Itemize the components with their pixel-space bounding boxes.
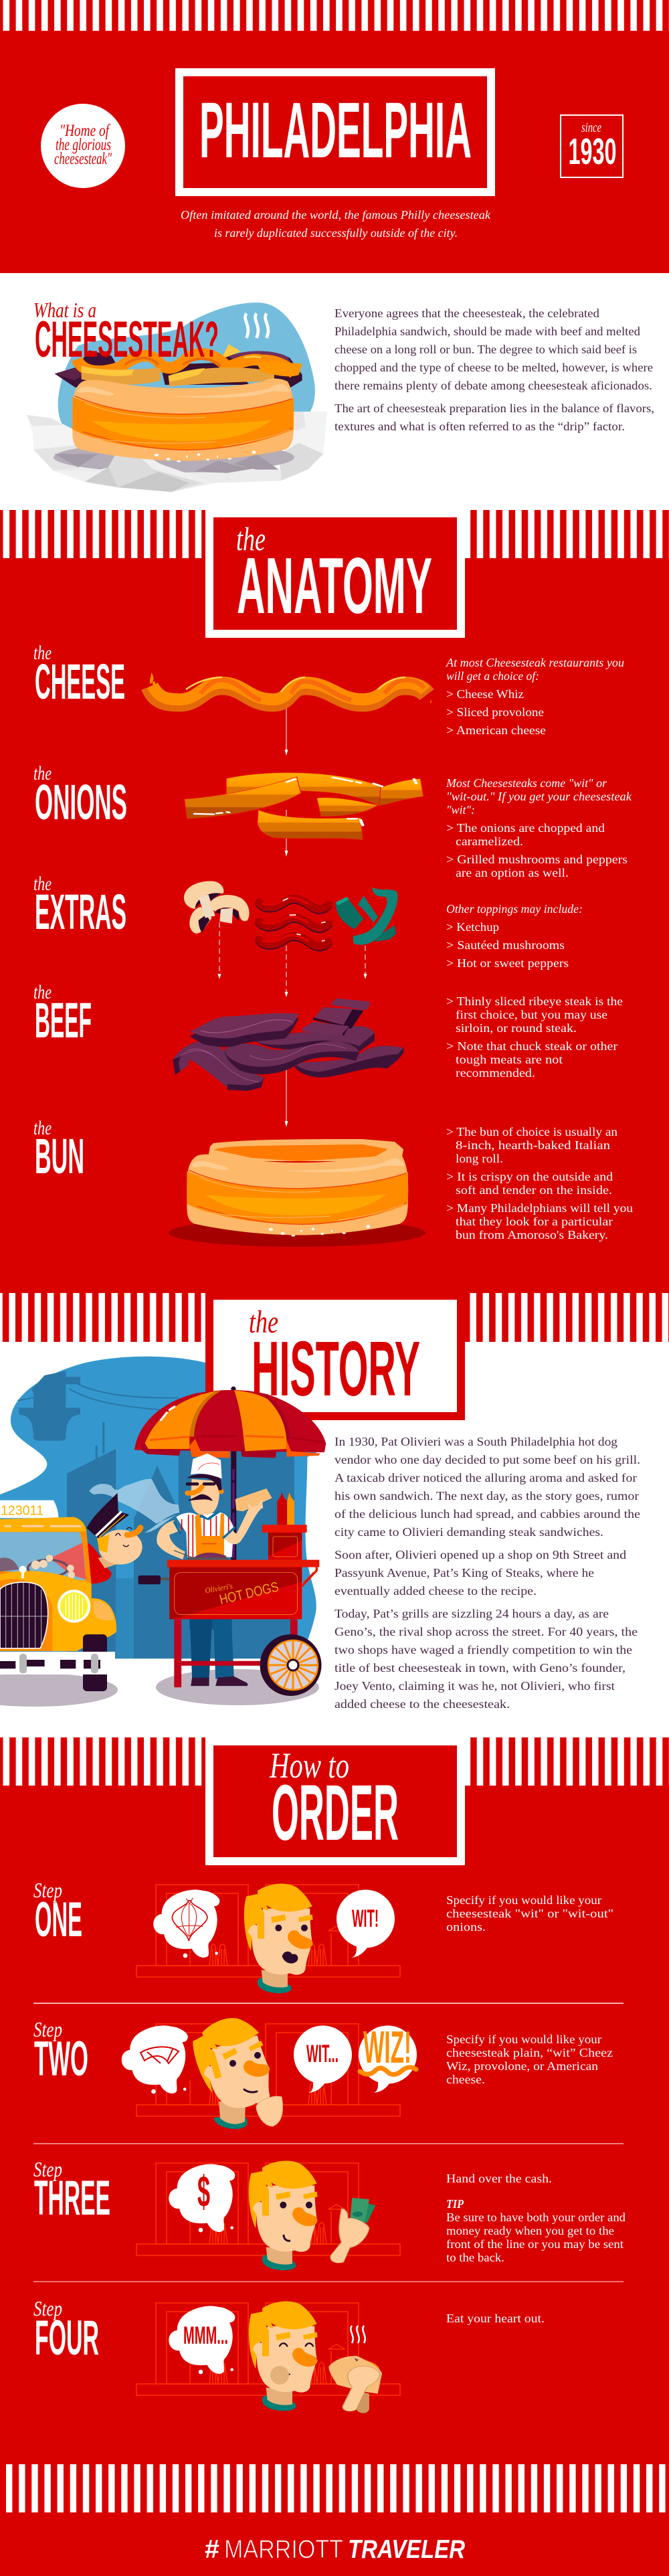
section title: the history: the xyxy=(249,1304,278,1340)
section title: the anatomy: the xyxy=(236,520,266,557)
arrows: extras to beef xyxy=(218,922,367,997)
history text: vendor who one day decided to put some beef on his grill. xyxy=(334,1453,640,1466)
step two label: Step xyxy=(33,2017,62,2041)
step two text xyxy=(446,2033,613,2086)
cart: HOT DOGS xyxy=(218,1579,280,1608)
intro subtitle: Often imitated around the world, the famous Philly cheesesteak xyxy=(181,208,491,222)
illustration: sliced beef xyxy=(173,999,403,1091)
panel: history xyxy=(0,1293,669,1737)
onions text: caramelized. xyxy=(456,835,523,848)
text: BEEF xyxy=(35,993,92,1048)
section title: how to order: How to xyxy=(269,1745,349,1786)
arrow: cheese to onions xyxy=(285,706,288,756)
cheese text xyxy=(446,656,624,737)
man thinking xyxy=(187,2010,283,2129)
step two text: cheese. xyxy=(446,2073,485,2086)
history text: Geno’s, the rival shop across the street. For 40 years, the xyxy=(334,1625,638,1638)
step one label: Step xyxy=(33,1878,62,1902)
footer hashtag: TRAVELER xyxy=(348,2535,465,2564)
bun text: soft and tender on the inside. xyxy=(456,1183,612,1197)
badge: home of the glorious cheesesteak: cheesesteak" xyxy=(54,150,112,168)
onions text: > Grilled mushrooms and peppers xyxy=(446,853,628,866)
beef text: recommended. xyxy=(456,1066,535,1080)
beef text: first choice, but you may use xyxy=(456,1008,607,1021)
step three text: front of the line or you may be sent xyxy=(446,2237,624,2251)
label: the onions: the xyxy=(33,762,52,784)
badge: since 1930: since xyxy=(581,120,601,135)
onions text xyxy=(446,776,632,879)
cheese text: > Cheese Whiz xyxy=(446,687,524,701)
step two text: Specify if you would like your xyxy=(446,2033,601,2046)
step two text: Wiz, provolone, or American xyxy=(446,2059,598,2073)
history text: Soon after, Olivieri opened up a shop on 9th Street and xyxy=(334,1548,626,1561)
step three text: Be sure to have both your order and xyxy=(446,2211,626,2224)
text: BUN xyxy=(35,1128,84,1184)
text: ONIONS xyxy=(35,774,127,830)
thought bubble: mmm xyxy=(169,2306,235,2374)
history text: Joey Vento, claiming it was he, not Olivieri, who first xyxy=(334,1679,615,1693)
thought bubble: money xyxy=(169,2164,235,2232)
footer hashtag: # xyxy=(205,2535,219,2564)
cart xyxy=(138,1560,319,1619)
illustration: caramelized onions xyxy=(185,772,423,840)
man eating xyxy=(249,2302,318,2411)
bun text: bun from Amoroso's Bakery. xyxy=(456,1228,608,1241)
history text: In 1930, Pat Olivieri was a South Philadelphia hot dog xyxy=(334,1435,617,1448)
driver xyxy=(86,1493,142,1584)
onions text: "wit-out." If you get your cheesesteak xyxy=(446,790,632,803)
history text: added cheese to the cheesesteak. xyxy=(334,1697,510,1711)
man with cash xyxy=(249,2161,318,2270)
extras text: > Ketchup xyxy=(446,920,499,934)
taxi xyxy=(0,1500,116,1691)
onions text: Most Cheesesteaks come "wit" or xyxy=(446,776,607,790)
extras text: > Sautéed mushrooms xyxy=(446,938,565,952)
beef text: > Thinly sliced ribeye steak is the xyxy=(446,995,623,1008)
condiment stand xyxy=(262,1492,307,1560)
label: the bun xyxy=(33,1117,84,1184)
history text: of the delicious lunch had spread, and cabbies around the xyxy=(334,1507,640,1521)
step three label xyxy=(33,2157,110,2225)
icon: ketchup xyxy=(259,897,328,948)
section title: the anatomy: ANATOMY xyxy=(237,541,432,630)
beef text xyxy=(446,995,623,1080)
section title: the history xyxy=(209,1296,461,1416)
ground shadows xyxy=(0,1669,319,1707)
history text xyxy=(334,1435,640,1711)
history text: two shops have waged a friendly competition to win the xyxy=(334,1643,632,1656)
text: EXTRAS xyxy=(35,884,126,940)
intro body text: Philadelphia sandwich, should be made with beef and melted xyxy=(334,325,640,338)
label: the cheese xyxy=(33,642,125,709)
icon: mushrooms xyxy=(184,881,250,934)
step four label xyxy=(33,2296,99,2365)
beef text: sirloin, or round steak. xyxy=(456,1021,577,1035)
footer hashtag xyxy=(205,2535,465,2564)
umbrella xyxy=(134,1390,326,1458)
thought bubble: money: $ xyxy=(197,2166,210,2216)
thought bubble: cheese xyxy=(122,2026,188,2093)
history text: Today, Pat’s grills are sizzling 24 hours a day, as are xyxy=(334,1607,609,1620)
bun text: > It is crispy on the outside and xyxy=(446,1170,613,1183)
footer hashtag: MARRIOTT xyxy=(224,2535,343,2564)
label: the cheese: the xyxy=(33,642,52,664)
bun text: 8-inch, hearth-baked Italian xyxy=(456,1138,610,1152)
illustration background: city skyline xyxy=(0,1357,324,1658)
heading: what is a cheesesteak: What is a xyxy=(33,298,96,322)
step four label: Step xyxy=(33,2296,62,2320)
intro body text: there remains plenty of debate among cheesesteak aficionados. xyxy=(334,379,652,392)
icon: green peppers xyxy=(336,889,397,944)
bun text xyxy=(446,1125,633,1241)
step three text: to the back. xyxy=(446,2251,504,2264)
history text: A taxicab driver noticed the alluring aroma and asked for xyxy=(334,1471,637,1484)
illustration: cheesesteak on paper xyxy=(27,303,327,492)
step two text: cheesesteak plain, “wit” Cheez xyxy=(446,2046,613,2059)
illustration: mushrooms, ketchup, peppers xyxy=(184,881,397,948)
badge: home of the glorious cheesesteak: "Home of xyxy=(60,122,110,140)
step one text: cheesesteak "wit" or "wit-out" xyxy=(446,1907,613,1920)
intro body text: chopped and the type of cheese to be melted, however, is where xyxy=(334,361,653,374)
step three text: Hand over the cash. xyxy=(446,2172,552,2185)
header stripes xyxy=(0,0,669,31)
intro subtitle: is rarely duplicated successfully outside of the city. xyxy=(214,226,458,240)
badge: home of the glorious cheesesteak xyxy=(41,104,125,188)
text: CHEESESTEAK? xyxy=(35,311,219,368)
hand with sandwich xyxy=(328,2356,382,2413)
speech bubble: wiz with cheese xyxy=(359,2022,417,2093)
onions text: > The onions are chopped and xyxy=(446,821,605,835)
text: TWO xyxy=(34,2032,88,2086)
pole xyxy=(231,1387,236,1561)
illustration: melted cheese wave xyxy=(150,673,432,703)
cart legs and vendor trousers xyxy=(174,1620,298,1687)
text: CHEESE xyxy=(35,654,125,709)
bun text: that they look for a particular xyxy=(456,1215,613,1228)
anatomy stripes xyxy=(0,510,669,558)
illustration: bun xyxy=(169,1139,425,1247)
arrow: onions to extras xyxy=(285,810,288,857)
onions text: are an option as well. xyxy=(456,866,569,879)
speech bubble: wit xyxy=(337,1890,395,1958)
badge: since 1930: 1930 xyxy=(569,131,617,172)
step three text: TIP xyxy=(446,2197,464,2211)
text: ONE xyxy=(35,1893,82,1947)
step one text: onions. xyxy=(446,1920,486,1934)
arrow: beef to bun xyxy=(285,1067,288,1127)
intro body text: cheese on a long roll or bun. The degree to which said beef is xyxy=(334,343,637,356)
history text: city came to Olivieri demanding steak sandwiches. xyxy=(334,1525,603,1539)
step three label: Step xyxy=(33,2157,62,2181)
bun text: > Many Philadelphians will tell you xyxy=(446,1201,633,1215)
section title: how to order: ORDER xyxy=(272,1769,399,1857)
step three illustration xyxy=(136,2161,400,2270)
section title: the anatomy xyxy=(209,513,461,634)
intro body text: Everyone agrees that the cheesesteak, the celebrated xyxy=(334,307,599,320)
intro body text: textures and what is often referred to as the “drip” factor. xyxy=(334,420,625,433)
badge: home of the glorious cheesesteak: the glorious xyxy=(56,136,111,154)
beef text: tough meats are not xyxy=(456,1053,563,1066)
bun text: long roll. xyxy=(456,1152,503,1165)
step one text xyxy=(446,1893,613,1934)
history stripes xyxy=(0,1293,669,1342)
step two illustration xyxy=(122,2010,417,2129)
extras text: > Hot or sweet peppers xyxy=(446,956,569,970)
thought bubble: onion xyxy=(153,1890,219,1958)
vendor xyxy=(157,1454,272,1630)
speech bubble: wit: WIT! xyxy=(352,1905,379,1932)
cheese text: will get a choice of: xyxy=(446,669,539,683)
footer stripes xyxy=(0,2464,669,2512)
man speaking xyxy=(244,1884,313,1993)
intro subtitle xyxy=(181,208,491,240)
hand holding cash xyxy=(330,2198,375,2263)
speech bubble: wit xyxy=(294,2025,352,2093)
history text: his own sandwich. The next day, as the story goes, rumor xyxy=(334,1489,639,1502)
thought bubble: mmm: MMM... xyxy=(183,2322,228,2349)
step one illustration xyxy=(136,1884,400,1993)
cheese text: At most Cheesesteak restaurants you xyxy=(446,656,624,669)
label: the beef: the xyxy=(33,981,52,1003)
cheese text: > American cheese xyxy=(446,723,546,737)
label: the beef xyxy=(33,981,92,1048)
heading: what is a cheesesteak xyxy=(33,298,219,368)
history text: eventually added cheese to the recipe. xyxy=(334,1584,537,1598)
intro body text: The art of cheesesteak preparation lies in the balance of flavors, xyxy=(334,402,654,415)
panel: what is a cheesesteak xyxy=(0,273,669,510)
label: the bun: the xyxy=(33,1117,52,1139)
onions text: "wit": xyxy=(446,803,475,817)
step three text xyxy=(446,2172,626,2264)
badge: since 1930 xyxy=(561,115,623,177)
order stripes xyxy=(0,1737,669,1786)
beef text: > Note that chuck steak or other xyxy=(446,1039,617,1053)
history text: title of best cheesesteak in town, with Geno’s founder, xyxy=(334,1661,626,1675)
extras text xyxy=(446,902,583,970)
history text: Passyunk Avenue, Pat’s King of Steaks, where he xyxy=(334,1566,594,1579)
label: the extras xyxy=(33,873,126,940)
title box: Philadelphia xyxy=(179,72,491,192)
cart: Olivieri's xyxy=(204,1581,233,1596)
intro body text xyxy=(334,307,654,433)
smoke xyxy=(89,1479,179,1533)
cheese text: > Sliced provolone xyxy=(446,705,544,719)
label: the extras: the xyxy=(33,873,52,895)
steam xyxy=(351,2326,365,2343)
section title: the history: HISTORY xyxy=(252,1325,420,1412)
extras text: Other toppings may include: xyxy=(446,902,583,916)
illustration: taxi and driver xyxy=(0,1479,179,1691)
bun text: > The bun of choice is usually an xyxy=(446,1125,617,1138)
step four illustration xyxy=(136,2302,400,2413)
step three text: money ready when you get to the xyxy=(446,2224,614,2237)
speech bubble: wiz with cheese: WIZ! xyxy=(363,2022,411,2073)
illustration: hot dog cart and vendor xyxy=(134,1387,326,1696)
section title: how to order xyxy=(209,1741,461,1861)
speech bubble: wit: WIT... xyxy=(306,2040,339,2067)
step four text: Eat your heart out. xyxy=(446,2312,545,2325)
step one text: Specify if you would like your xyxy=(446,1893,601,1907)
label: the onions xyxy=(33,762,127,830)
text: FOUR xyxy=(35,2311,99,2365)
taxi: 123011 xyxy=(1,1503,43,1518)
cart wheel xyxy=(260,1634,321,1696)
step two label xyxy=(33,2017,88,2086)
text: THREE xyxy=(34,2171,110,2225)
step one label xyxy=(33,1878,82,1947)
